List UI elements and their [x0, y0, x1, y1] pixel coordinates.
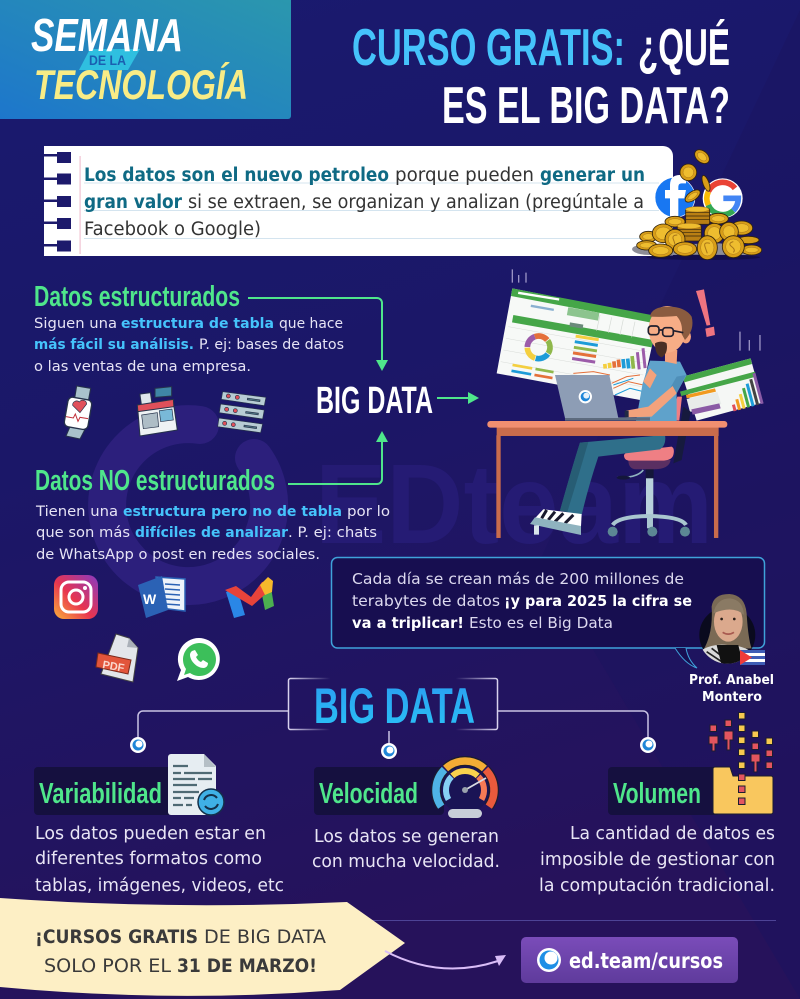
connectors: Big Data to three Vs	[138, 711, 648, 744]
node: left dot	[130, 737, 146, 753]
banner: Semana de la Tecnología: TECNOLOGÍA	[34, 61, 248, 108]
legs	[530, 435, 665, 535]
icon: Facebook, Google and coins	[632, 147, 762, 260]
icon: PDF file	[96, 634, 138, 682]
intro text: Los datos son el nuevo petroleo	[84, 165, 389, 186]
text: Datos estructurados description: Siguen una	[34, 316, 117, 332]
intro text: Facebook o Google)	[84, 219, 261, 240]
text: Datos estructurados description: más fácil su análisis.	[34, 337, 194, 353]
watermark: EDteam logo	[107, 424, 713, 586]
icon: Instagram	[54, 575, 98, 619]
title: CURSO GRATIS:	[352, 19, 625, 77]
torso	[625, 350, 687, 421]
text: Datos NO estructurados description: Tienen una	[35, 504, 118, 520]
icon: Word	[138, 576, 185, 618]
arrow: banner to button	[385, 951, 506, 969]
icon: WhatsApp	[177, 638, 220, 681]
panel: Volumen: Volumen	[613, 778, 701, 810]
text: Los datos se generan	[314, 826, 499, 847]
watermark: EDteam logo: EDteam	[315, 441, 713, 567]
panel: Variabilidad	[34, 754, 284, 896]
banner: Semana de la Tecnología: SEMANA	[31, 9, 183, 61]
text: Datos NO estructurados description: difíciles de analizar	[135, 525, 289, 541]
icon: document sync	[168, 754, 224, 815]
text: Datos NO estructurados description: que son más	[36, 525, 130, 541]
intro text: si se extraen, se organizan y analizan (pregúntale a	[188, 192, 644, 213]
panel: notebook intro	[44, 146, 673, 256]
heading: Datos estructurados: Datos estructurados	[34, 281, 240, 313]
text: La cantidad de datos es	[570, 823, 775, 844]
heading: Datos NO estructurados: Datos NO estructurados	[35, 465, 275, 497]
spreadsheet back	[497, 288, 658, 400]
heading: BIG DATA main: BIG DATA	[314, 678, 475, 734]
text: Datos estructurados description: que hace	[279, 316, 343, 332]
arrow: no estructurados to Big Data	[288, 431, 388, 484]
label: Prof. Anabel Montero: Montero	[702, 690, 762, 705]
quote text: va a triplicar!	[352, 614, 464, 632]
text: con mucha velocidad.	[312, 851, 500, 872]
arrow: Big Data to illustration	[437, 392, 479, 404]
quote text: ¡y para 2025 la cifra se	[504, 592, 692, 610]
banner: cursos gratis	[0, 898, 405, 996]
text: Datos estructurados description: estructura de tabla	[121, 316, 274, 332]
text: Los datos pueden estar en	[35, 823, 266, 844]
icon: PDF file: PDF	[101, 659, 126, 675]
chair	[608, 397, 691, 537]
text: Datos NO estructurados description: por lo	[347, 504, 390, 520]
panel: Volumen	[539, 712, 781, 896]
button: ed.team/cursos: ed.team/cursos	[569, 949, 723, 973]
intro text: generar un	[540, 165, 645, 186]
text: Datos NO estructurados description: de WhatsApp o post en redes sociales.	[36, 547, 320, 563]
intro text: porque pueden	[395, 165, 534, 186]
flag: Cuba	[740, 650, 765, 665]
portrait: Prof. Anabel Montero	[699, 594, 755, 665]
node: right dot	[640, 737, 656, 753]
label: BIG DATA center: BIG DATA	[316, 380, 433, 422]
text: Datos estructurados description: P. ej: bases de datos	[199, 337, 344, 353]
panel: Velocidad	[312, 761, 505, 872]
banner: cursos gratis: DE BIG DATA	[204, 926, 326, 948]
text: Datos estructurados description: o las ventas de una empresa.	[34, 359, 251, 375]
panel: Velocidad: Velocidad	[319, 778, 418, 810]
banner: Semana de la Tecnología: DE LA	[89, 52, 126, 68]
banner: Semana de la Tecnología	[0, 0, 291, 119]
text: tablas, imágenes, videos, etc	[35, 875, 284, 896]
icon: smartwatch	[64, 386, 92, 439]
node: middle dot	[381, 743, 397, 759]
banner: cursos gratis: ¡CURSOS GRATIS	[35, 926, 198, 948]
icon: database servers	[218, 392, 266, 433]
text: Datos NO estructurados description: estructura pero no de tabla	[123, 504, 342, 520]
text: Datos NO estructurados description: . P. ej: chats	[288, 525, 377, 541]
exclamation	[696, 289, 715, 337]
quote text: Cada día se crean más de 200 millones de	[352, 570, 684, 588]
text: la computación tradicional.	[539, 875, 775, 896]
icon: folder with data pixels	[709, 712, 773, 814]
icon: cash register	[137, 387, 177, 436]
title	[352, 19, 730, 135]
icon: Gmail	[225, 577, 274, 618]
icon: Word: W	[143, 591, 157, 607]
illustration: person at desk with spreadsheets	[487, 269, 764, 538]
panel: Variabilidad: Variabilidad	[39, 778, 162, 810]
icon: gauge	[436, 761, 494, 818]
intro text: gran valor	[84, 192, 183, 213]
quote text: terabytes de datos	[352, 592, 500, 610]
text: imposible de gestionar con	[540, 849, 775, 870]
head	[648, 306, 692, 357]
label: Prof. Anabel Montero: Prof. Anabel	[689, 673, 774, 688]
ticks	[512, 269, 760, 351]
spreadsheet front	[680, 358, 764, 421]
banner: cursos gratis: 31 DE MARZO!	[177, 955, 317, 977]
callout: Prof. Anabel quote	[332, 558, 764, 668]
banner: cursos gratis: SOLO POR EL	[44, 955, 171, 977]
text: diferentes formatos como	[35, 848, 262, 869]
table	[487, 421, 727, 538]
arrow: estructurados to Big Data	[248, 298, 388, 371]
title: ¿QUÉ	[638, 19, 730, 77]
button: ed.team/cursos	[521, 937, 738, 983]
laptop	[555, 375, 650, 421]
quote text: Esto es el Big Data	[469, 614, 613, 632]
